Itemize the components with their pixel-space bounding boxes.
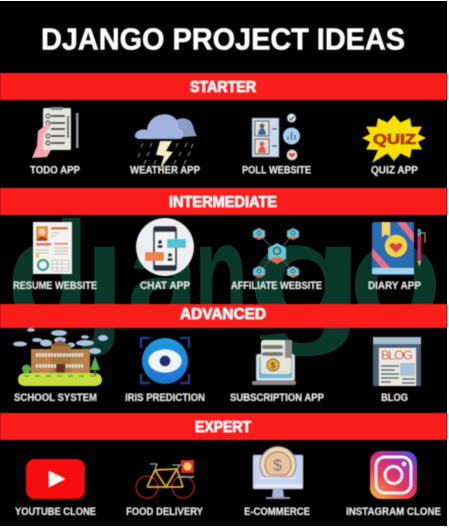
banner: advanced xyxy=(0,304,447,328)
label: resume website: RESUME WEBSITE xyxy=(13,280,97,292)
label: school system: SCHOOL SYSTEM xyxy=(14,392,97,404)
icon: chat xyxy=(136,218,194,276)
watermark: django logo text: d xyxy=(7,192,90,357)
banner: starter: STARTER xyxy=(190,79,256,96)
icon: blog xyxy=(373,337,421,386)
icon: iris xyxy=(141,338,189,384)
watermark: django logo text: j xyxy=(81,192,125,357)
icon: e-commerce monitor xyxy=(253,447,303,499)
label: diary app: DIARY APP xyxy=(368,280,421,292)
icon: quiz burst xyxy=(362,115,426,163)
label: e-commerce: E-COMMERCE xyxy=(244,506,310,518)
watermark: django logo text: o xyxy=(349,192,442,357)
icon: resume xyxy=(33,222,72,274)
watermark: django logo text: g xyxy=(247,192,364,357)
watermark: django logo text: n xyxy=(194,192,248,357)
icon: food delivery bicycle xyxy=(136,460,194,498)
label: weather app: WEATHER APP xyxy=(130,164,200,176)
icon: school xyxy=(13,328,108,386)
icon: blog: BLOG xyxy=(381,348,413,362)
label: quiz app: QUIZ APP xyxy=(371,164,418,176)
watermark: django logo text: a xyxy=(127,192,200,357)
icon: weather storm xyxy=(135,114,197,169)
icon: affiliate network xyxy=(253,228,299,278)
label: blog: BLOG xyxy=(381,392,408,404)
banner: starter xyxy=(0,73,447,100)
icon: todo clipboard xyxy=(32,107,78,158)
label: subscription app: SUBSCRIPTION APP xyxy=(230,392,324,404)
icon: poll website xyxy=(252,114,300,160)
label: affiliate website: AFFILIATE WEBSITE xyxy=(231,280,322,292)
banner: expert: EXPERT xyxy=(195,419,251,436)
icon: instagram xyxy=(370,451,417,499)
banner: intermediate xyxy=(0,188,447,215)
label: poll website: POLL WEBSITE xyxy=(242,164,311,176)
icon: diary xyxy=(372,222,425,275)
watermark: django logo text xyxy=(12,218,436,356)
label: todo app: TODO APP xyxy=(30,164,80,176)
banner: advanced: ADVANCED xyxy=(180,306,266,323)
label: food delivery: FOOD DELIVERY xyxy=(126,506,204,518)
icon: subscription laptop xyxy=(252,340,296,385)
icon: subscription laptop: $ xyxy=(270,360,276,370)
banner: intermediate: INTERMEDIATE xyxy=(169,194,277,211)
icon: e-commerce monitor: $ xyxy=(273,458,282,474)
icon: quiz burst: QUIZ xyxy=(373,131,416,148)
label: youtube clone: YOUTUBE CLONE xyxy=(15,506,96,518)
label: iris prediction: IRIS PREDICTION xyxy=(125,392,205,404)
title: DJANGO PROJECT IDEAS xyxy=(41,22,405,56)
banner: expert xyxy=(0,413,447,440)
label: chat app: CHAT APP xyxy=(140,280,190,292)
icon: youtube xyxy=(26,459,85,499)
